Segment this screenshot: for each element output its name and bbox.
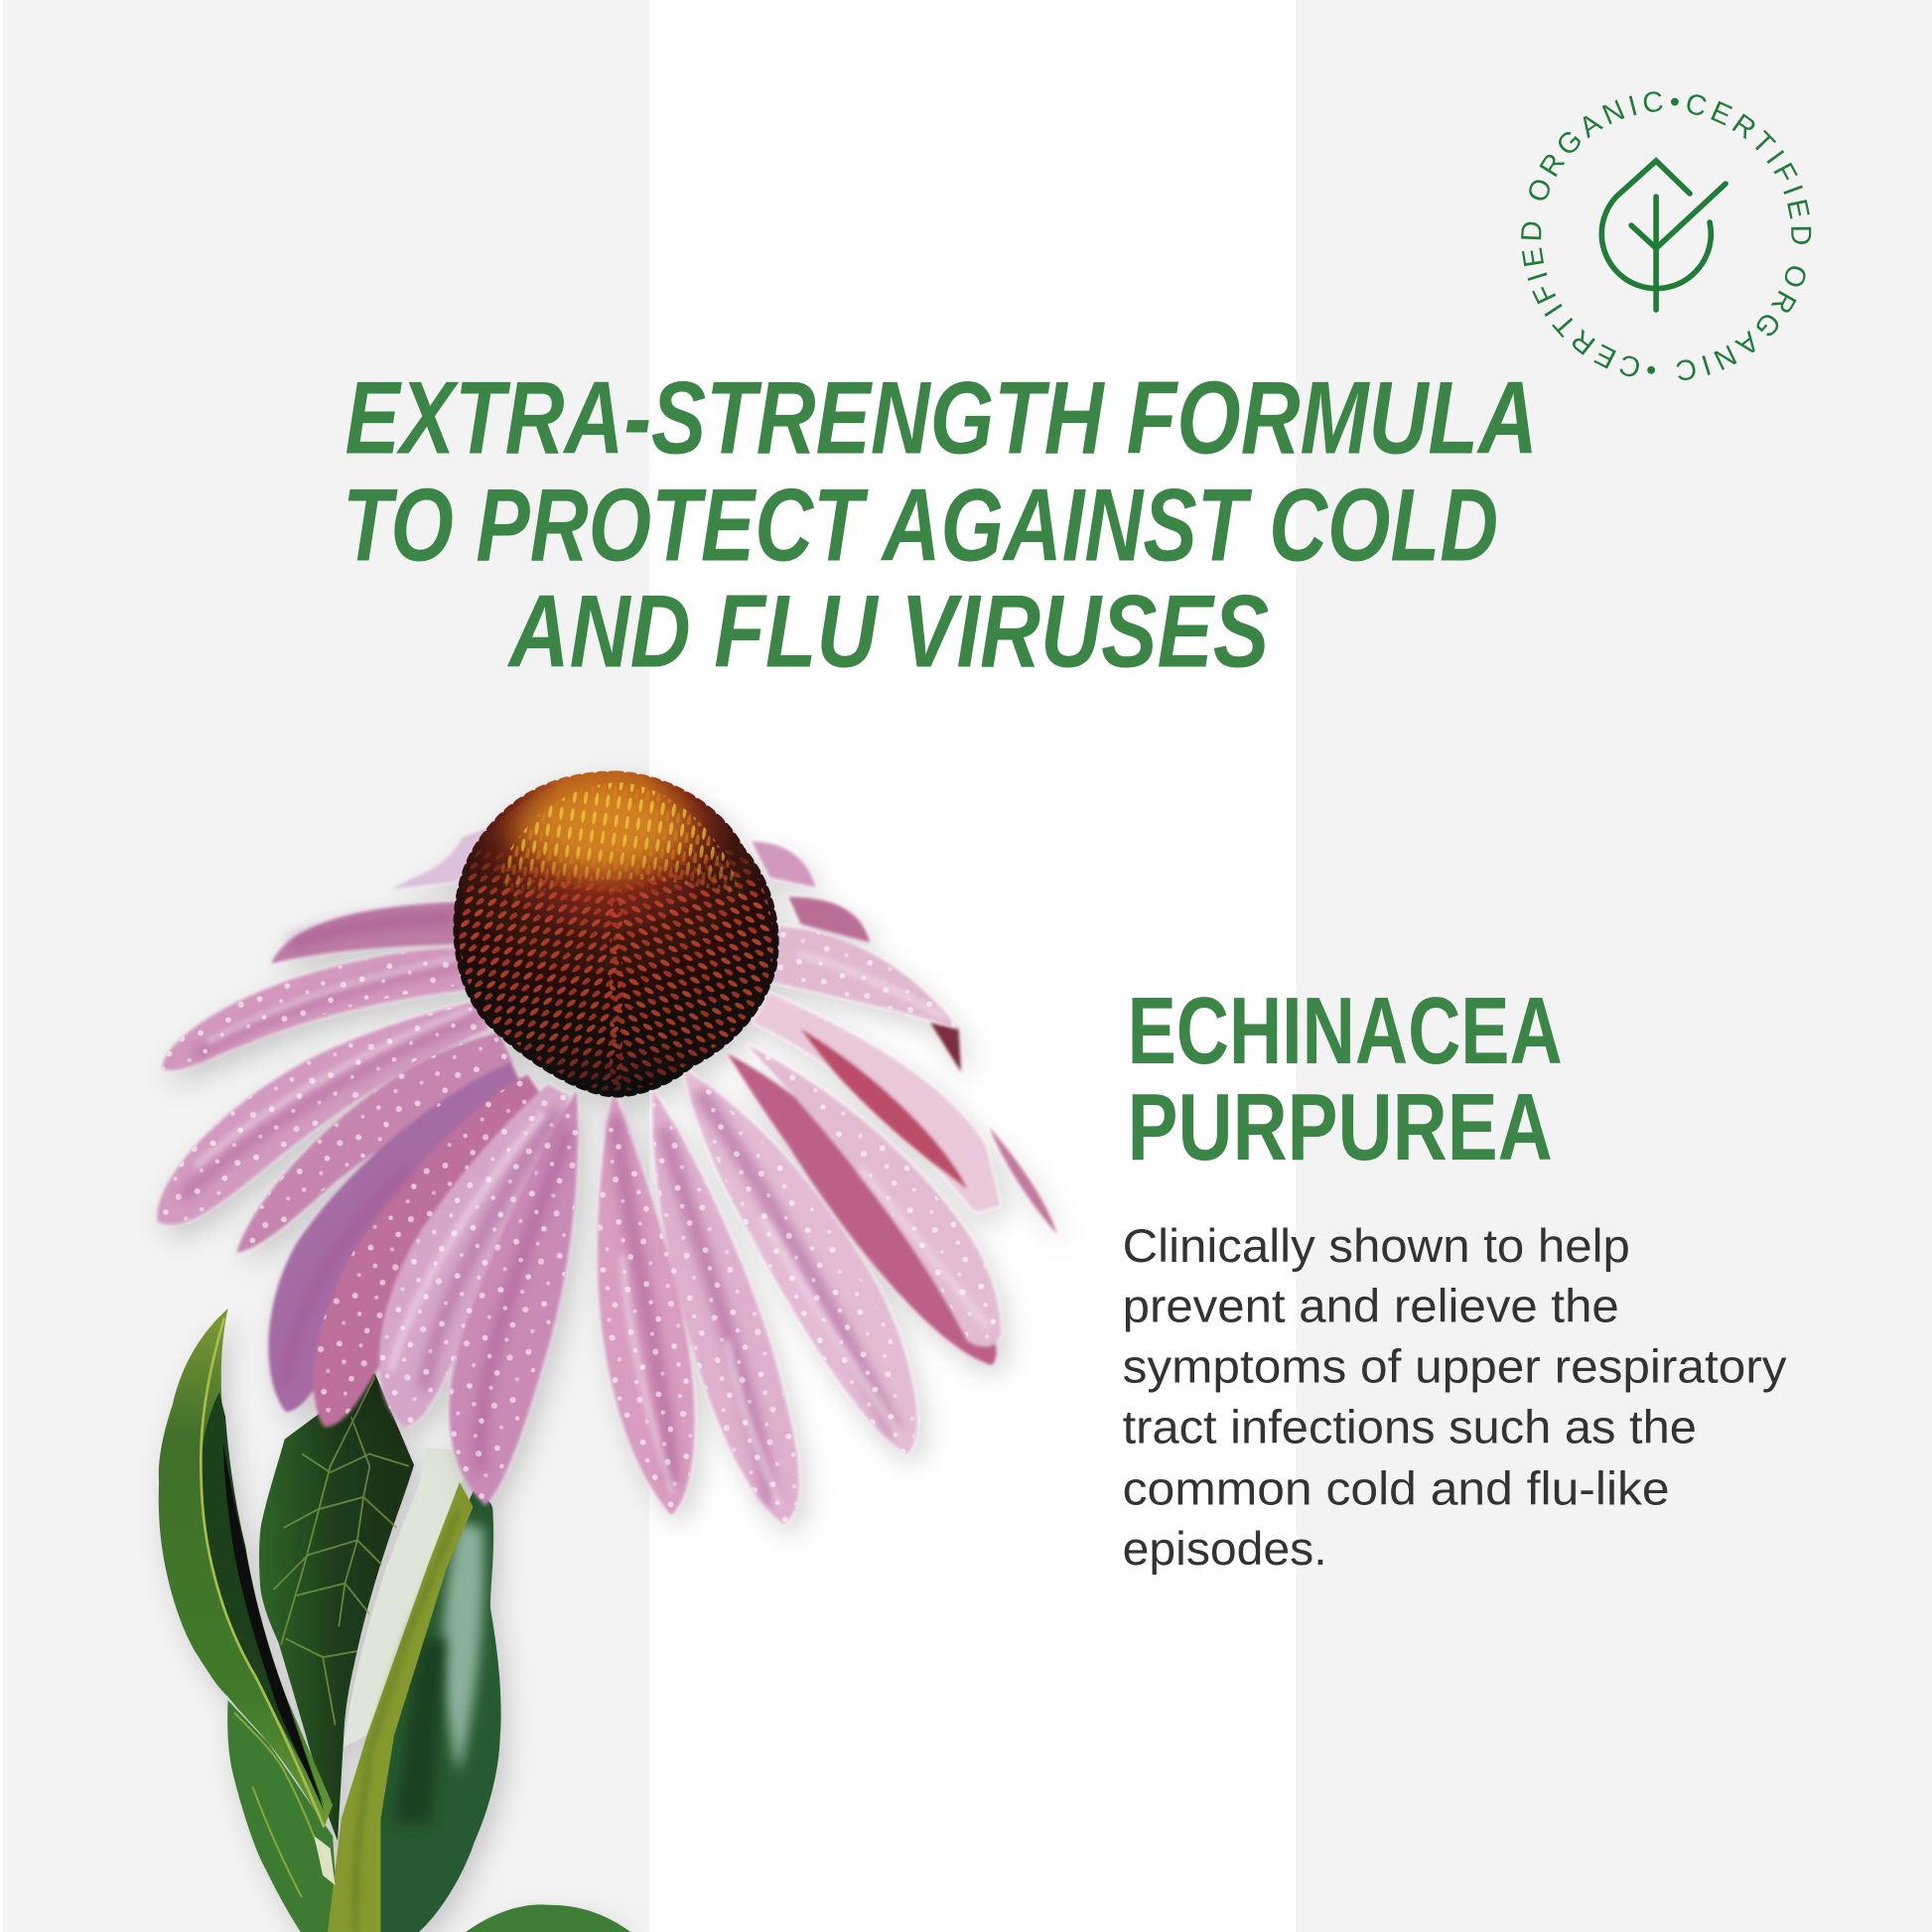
- body text: symptoms of upper respiratory: [1123, 1339, 1787, 1392]
- petal: center left: [449, 1090, 578, 1506]
- petal shading stripes: [185, 918, 894, 1497]
- body text: tract infections such as the: [1123, 1400, 1697, 1452]
- petal: right upper: [770, 926, 959, 1031]
- illustration: echinacea flower: [157, 776, 1057, 1524]
- headline: TO PROTECT AGAINST COLD: [343, 469, 1498, 584]
- headline: [343, 361, 1538, 689]
- olive stem: [328, 1482, 474, 1932]
- small pale bud: [314, 1836, 336, 1885]
- product heading: ECHINACEA: [1128, 978, 1563, 1084]
- body text: Clinically shown to help: [1123, 1219, 1630, 1272]
- dew drops: [157, 926, 1001, 1524]
- badge: certified organic: [1521, 91, 1811, 380]
- back petals: [392, 828, 961, 1072]
- petal: left lower: [157, 1001, 487, 1224]
- petal: purple: [268, 1062, 523, 1412]
- petal: right red: [755, 993, 1001, 1210]
- petals: [157, 901, 1057, 1524]
- headline: AND FLU VIRUSES: [506, 574, 1269, 689]
- bottom right leaf: [466, 1904, 630, 1932]
- body text: episodes.: [1123, 1522, 1327, 1575]
- petal highlights: [198, 955, 986, 1503]
- petal: thin right: [990, 1128, 1057, 1235]
- headline: EXTRA-STRENGTH FORMULA: [345, 361, 1538, 477]
- product heading: [1128, 978, 1563, 1180]
- right grey-green leaf: [381, 1491, 520, 1932]
- white stem side: [344, 1448, 483, 1747]
- petal: center right: [652, 1090, 799, 1524]
- petal: far left: [163, 948, 479, 1070]
- petal: left narrow: [236, 1033, 512, 1253]
- product heading: PURPUREA: [1128, 1074, 1553, 1180]
- body text: [1123, 1219, 1787, 1575]
- petal: center: [598, 1090, 694, 1516]
- petal: upper left: [271, 901, 464, 964]
- badge ring text: •CERTIFIED ORGANIC •CERTIFIED ORGANIC: [1521, 91, 1811, 380]
- seed cone: [459, 776, 778, 1092]
- left leaf: [159, 1309, 333, 1828]
- petal: magenta: [314, 1074, 542, 1427]
- lower left leaf: [227, 1701, 339, 1932]
- left leaf fold: [201, 1392, 324, 1806]
- icon: leaf with check: [1601, 161, 1725, 310]
- center dark leaf: [259, 1373, 414, 1841]
- body text: prevent and relieve the: [1123, 1280, 1619, 1332]
- petal: pale: [379, 1084, 569, 1427]
- body text: common cold and flu-like: [1123, 1461, 1670, 1514]
- petal: right lower: [684, 1069, 916, 1453]
- illustration: stem and leaves: [159, 1309, 630, 1932]
- petal: deep red-pink: [727, 1053, 997, 1365]
